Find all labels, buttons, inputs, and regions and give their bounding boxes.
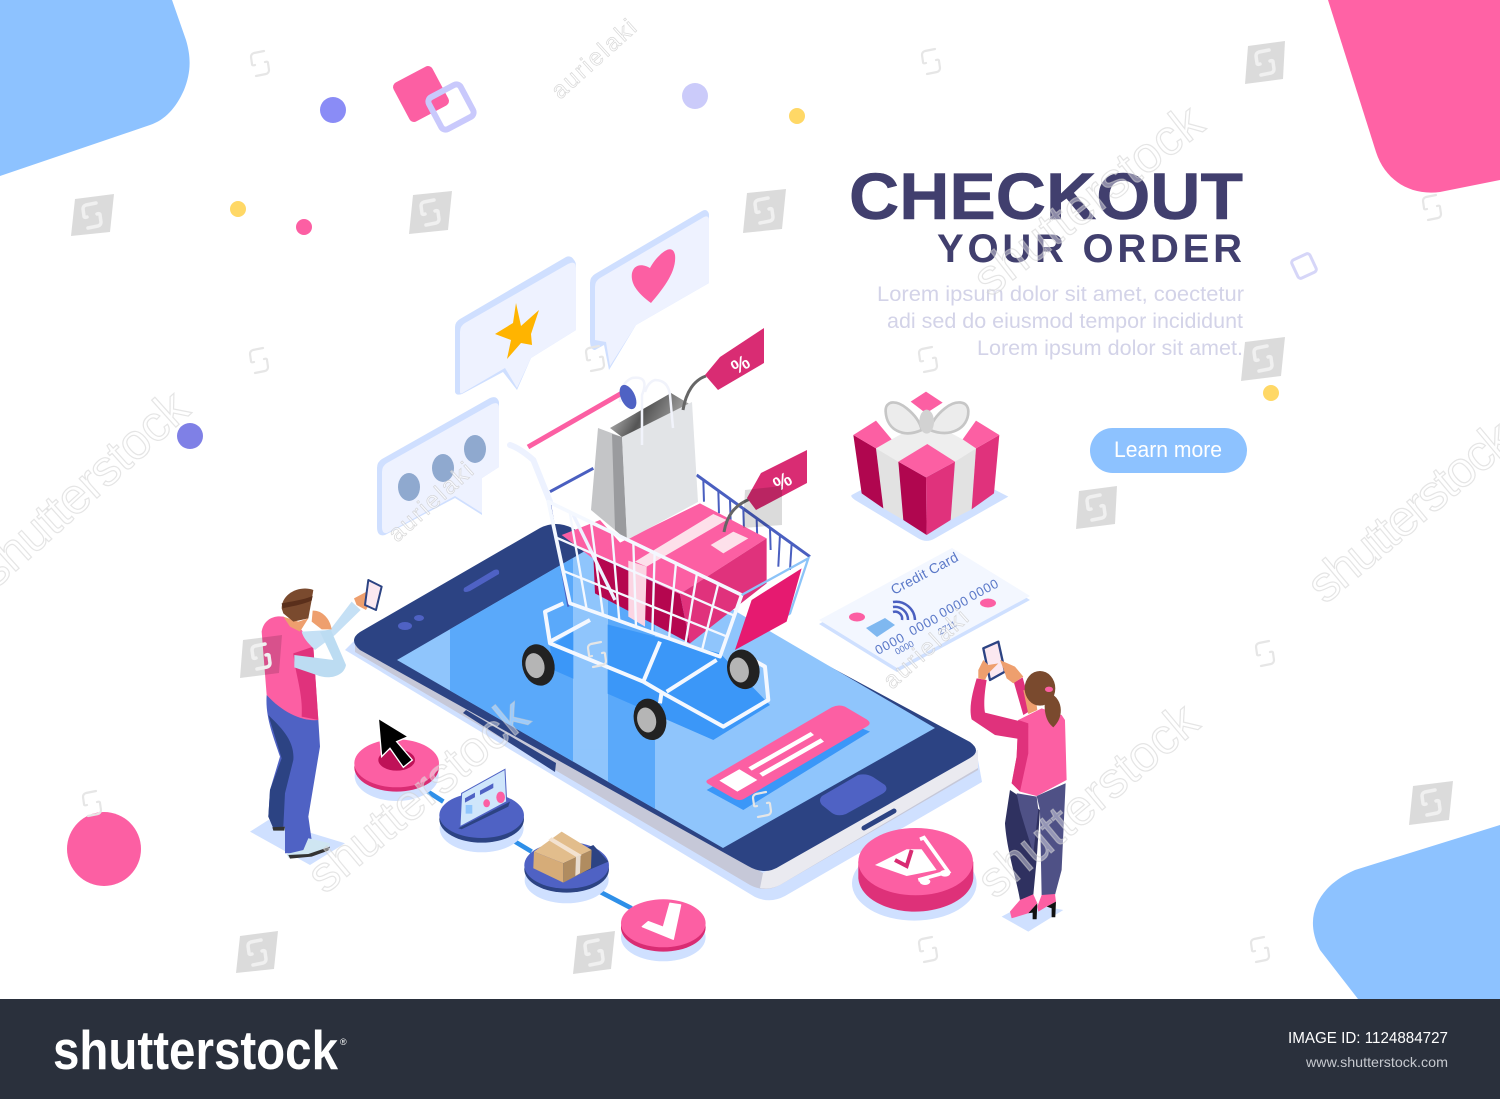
stock watermark text: shutterstock: [296, 686, 540, 903]
gift box: [851, 392, 1008, 541]
hand and phone: [354, 592, 374, 610]
author watermark text: aurielaki: [383, 457, 479, 547]
credit card: 0000: [872, 630, 907, 658]
footer url: www.shutterstock.com: [1305, 1054, 1448, 1070]
credit card: 0000: [936, 593, 971, 621]
shopping cart: [550, 468, 810, 750]
arms: [971, 678, 1028, 740]
sale tag lower: %: [770, 468, 796, 496]
jacket: [1012, 708, 1067, 796]
credit card: Credit Card: [888, 549, 961, 598]
sale tag top: %: [728, 351, 754, 379]
learn more button: [1090, 428, 1247, 473]
legs: [1005, 790, 1040, 900]
learn more button: Learn more: [1114, 437, 1222, 462]
shirt: [262, 616, 318, 720]
footer bar: [0, 999, 1500, 1099]
chat bubble: star: [455, 256, 576, 395]
small watermark marks: [83, 49, 1441, 962]
cart frame and wheels: [510, 445, 808, 744]
cart side flap: [733, 558, 808, 650]
step connectors: [420, 787, 632, 908]
registered mark: ®: [340, 1037, 347, 1047]
cart base frame: [545, 603, 768, 727]
credit card: [819, 548, 1030, 672]
front wire basket: [510, 445, 742, 657]
sale tag top: [683, 328, 764, 410]
trousers: [266, 695, 320, 853]
heading: checkout your order: YOUR ORDER: [937, 227, 1242, 271]
image id: IMAGE ID: 1124884727: [1288, 1030, 1448, 1047]
watermark tile marks: [83, 50, 1440, 965]
credit card: 0000: [906, 611, 941, 639]
step 2 disc: [439, 793, 524, 852]
hands: [978, 660, 998, 680]
phone: [983, 642, 1005, 680]
stock watermark text: shutterstock: [962, 93, 1214, 307]
shoes: [287, 838, 330, 858]
back wires: [550, 468, 810, 607]
author watermark text: aurielaki: [546, 14, 642, 104]
body copy: Lorem ipsum dolor sit amet, coectetur: [877, 283, 1244, 306]
body copy: adi sed do eiusmod tempor incididunt: [887, 310, 1243, 333]
step 4 disc: [621, 899, 706, 961]
chat bubble: typing dots: [377, 397, 499, 535]
sale tag lower: [724, 450, 807, 532]
footer logo: shutterstock: [53, 1019, 338, 1081]
high heels: [1010, 894, 1037, 918]
heading: checkout your order: [849, 159, 1243, 271]
cursor arrow: [378, 718, 412, 767]
bow: [886, 402, 968, 434]
decorative dots and squares: [177, 64, 1317, 449]
author watermark text: [383, 14, 974, 694]
shopping bag: [591, 378, 698, 540]
cart button: [852, 828, 977, 921]
step 3 disc: [524, 842, 609, 903]
phone speaker and camera: [398, 570, 886, 815]
box in cart: [562, 503, 767, 643]
parcel box: [533, 832, 592, 883]
order summary card on screen: [706, 705, 870, 810]
arms: [302, 602, 361, 650]
phone side slots: [463, 710, 894, 828]
pink handle bar: [528, 382, 640, 447]
mini payment card: [458, 769, 510, 829]
cart shadow: [550, 620, 770, 740]
body copy: Lorem ipsum dolor sit amet.: [977, 337, 1243, 360]
credit card: 2711: [936, 619, 958, 637]
author watermark text: aurielaki: [878, 604, 974, 694]
chat bubble: heart: [590, 210, 709, 370]
screen stripes: [450, 558, 655, 809]
body copy: [877, 283, 1244, 360]
head and ponytail: [1023, 690, 1037, 714]
credit card: 0000: [893, 639, 916, 657]
stock watermark text: shutterstock: [966, 691, 1210, 908]
person: man with phone: [250, 580, 382, 865]
check mark: [642, 903, 681, 939]
step 1 disc: [354, 739, 439, 801]
checkout steps: [354, 718, 706, 961]
credit card: 0000: [966, 576, 1001, 604]
heading: checkout your order: CHECKOUT: [849, 159, 1243, 233]
stock watermark tiles: [71, 41, 1453, 974]
smartphone platform: [345, 500, 982, 900]
head: [283, 617, 308, 632]
person: woman with phone and order button: [852, 642, 1067, 932]
cart wheels: [517, 641, 764, 744]
